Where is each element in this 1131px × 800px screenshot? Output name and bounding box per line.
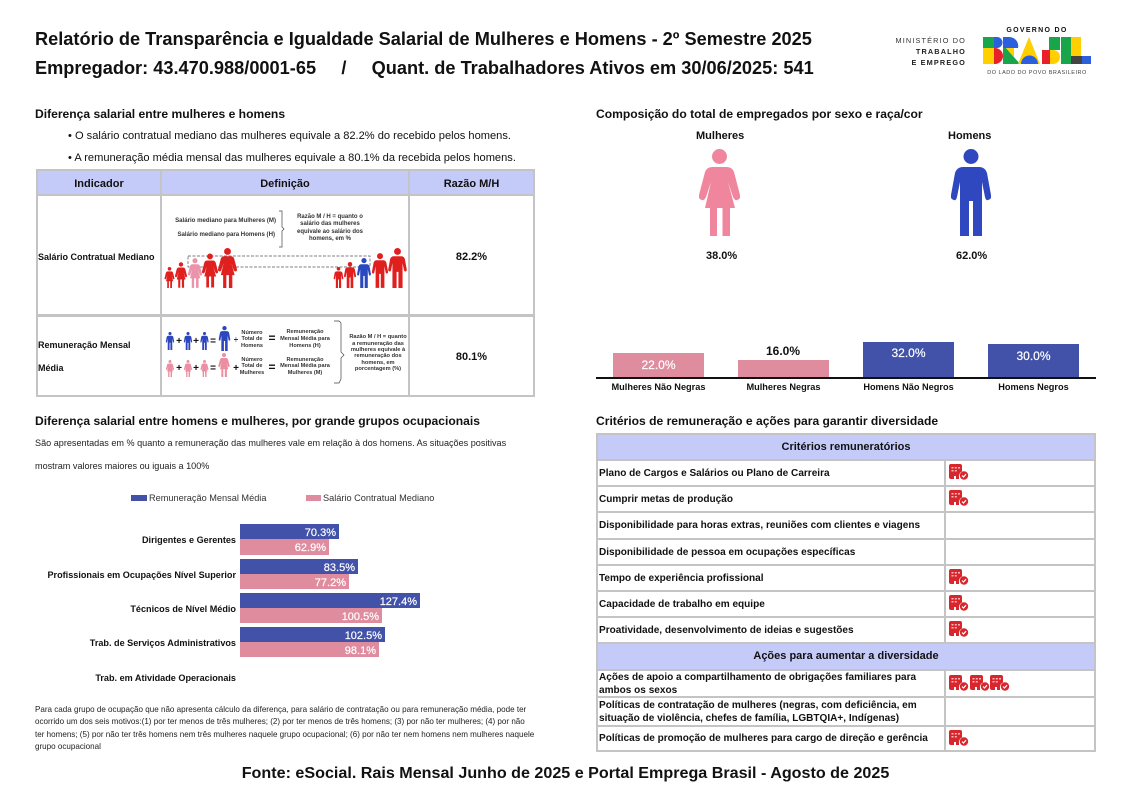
row empty cell: availability overtime [944, 511, 1096, 540]
row: career plan: Plano de Cargos e Salários ou Plano de Carreira [599, 468, 830, 479]
definition cell: median salary diagram: Salário mediano para Homens (H) [177, 231, 275, 238]
row label: median salary [36, 194, 162, 317]
bars: professionals: 83.5% [324, 562, 355, 574]
label: men: Homens [948, 130, 991, 142]
text: footnote [35, 705, 534, 751]
title: Empregador: 43.470.988/0001-65 / Quant. de Trabalhadores Ativos em 30/06/2025: 541 [35, 58, 814, 78]
row icon cell: teamwork [944, 590, 1096, 618]
value: 82.2% [408, 194, 535, 317]
definition cell: median salary diagram: salário das mulheres [300, 221, 361, 227]
definition cell: median salary diagram [160, 194, 410, 317]
definition cell: average pay diagram: Razão M / H = quanto [349, 334, 407, 340]
text: chart explanation: mostram valores maiores ou iguais a 100% [35, 460, 209, 470]
row icon cell: promotion [944, 725, 1096, 752]
table header: remuneration criteria [596, 433, 1096, 461]
category: professionals: Profissionais em Ocupações Nível Superior [47, 570, 236, 580]
logo: government ministry and Brasil: MINISTÉRIO DO [896, 36, 966, 45]
title [35, 29, 814, 78]
definition cell: average pay diagram: Total de [241, 336, 263, 342]
bar: non-black men: 32.0% [891, 346, 926, 360]
category: operational: Trab. em Atividade Operacionais [95, 673, 236, 683]
bar chart: occupational groups: 100.5% [342, 611, 379, 623]
icon: woman [699, 149, 740, 236]
legend: Remuneração Mensal Média [149, 493, 266, 503]
title: Relatório de Transparência e Igualdade Salarial de Mulheres e Homens - 2º Semestre 2025 [35, 29, 812, 49]
row label: average pay: Remuneração Mensal [38, 340, 131, 350]
text: median salary ratio: • O salário contratual mediano das mulheres equivale a 82.2% do recebido pelos homens. [68, 130, 511, 142]
definition cell: median salary diagram: equivale ao salário dos [297, 229, 364, 235]
definition cell: average pay diagram: a remuneração das [352, 341, 404, 347]
definition cell: average pay diagram: Número [241, 330, 263, 336]
value: women 38%: 38.0% [706, 250, 737, 262]
row icon cell: proactivity [944, 616, 1096, 644]
logo: government ministry and Brasil: GOVERNO DO [1006, 27, 1068, 34]
definition cell: average pay diagram: + [176, 336, 182, 347]
row icon cell: career plan [944, 459, 1096, 487]
row: availability overtime [596, 511, 946, 540]
panel: occupational groups [35, 414, 534, 751]
definition cell: average pay diagram: Mulheres (M) [288, 370, 322, 376]
row: specific occupations: Disponibilidade de pessoa em ocupações específicas [599, 547, 855, 558]
definition cell: average pay diagram: Remuneração [286, 329, 324, 335]
legend [131, 493, 434, 503]
bars: technicians [240, 593, 420, 608]
bar: non-black men [863, 342, 954, 377]
value: 82.2%: 82.2% [456, 251, 487, 263]
row: hiring women: situação de violência, chefes de família, LGBTQIA+, Indígenas) [599, 712, 899, 724]
row: family obligations [596, 669, 946, 698]
table header: ratio [408, 169, 535, 196]
definition cell: average pay diagram: ÷ [234, 335, 239, 344]
bar: non-black women: 22.0% [641, 358, 676, 372]
definition cell: median salary diagram: Razão M / H = quanto o [297, 214, 363, 220]
label: women: Mulheres [696, 130, 744, 142]
row icon cell: family obligations [944, 669, 1096, 698]
bars: administrative: 102.5% [345, 630, 382, 642]
definition cell: average pay diagram: Homens (H) [289, 343, 321, 349]
definition cell: average pay diagram: remuneração dos [354, 353, 402, 359]
definition cell: average pay diagram: Mulheres [240, 370, 264, 376]
heading: criteria: Critérios de remuneração e ações para garantir diversidade [596, 414, 938, 428]
definition cell: average pay diagram: + [193, 336, 199, 347]
logo: government ministry and Brasil: E EMPREGO [911, 58, 966, 67]
bar chart: occupational groups: 77.2% [315, 577, 346, 589]
row: family obligations: Ações de apoio a compartilhamento de obrigações familiares para [599, 672, 916, 683]
row: production goals [596, 485, 946, 513]
definition cell: average pay diagram [160, 315, 410, 397]
text: chart explanation [35, 438, 506, 471]
logo: government ministry and Brasil: DO LADO DO POVO BRASILEIRO [987, 70, 1087, 76]
heading: salary difference: Diferença salarial entre mulheres e homens [35, 107, 285, 121]
text: footnote: grupo ocupacional [35, 742, 101, 751]
text: footnote: ter homens; (5) por não ter três homens nem três mulheres naquele grupo ocupacional; (6) por não ter nem homens nem mulheres naquele [35, 730, 534, 739]
definition cell: average pay diagram: Número [241, 357, 263, 363]
row: availability overtime: Disponibilidade para horas extras, reuniões com clientes e viagens [599, 520, 920, 531]
definition cell: average pay diagram: porcentagem (%) [355, 366, 401, 372]
row icon cell: production goals [944, 485, 1096, 513]
bars: professionals [240, 559, 358, 574]
value: 80.1%: 80.1% [456, 351, 487, 363]
table header: diversity actions: Ações para aumentar a diversidade [753, 650, 939, 662]
bar: black women [738, 360, 829, 377]
row: promotion [596, 725, 946, 752]
definition cell: average pay diagram: Mensal Média para [280, 336, 331, 342]
definition cell: average pay diagram: + [233, 363, 239, 374]
category: non-black women: Mulheres Não Negras [612, 382, 705, 392]
table header: indicator [36, 169, 162, 196]
category: black men: Homens Negros [998, 382, 1069, 392]
definition cell: average pay diagram: homens, em [361, 360, 395, 366]
table header: definition: Definição [260, 178, 310, 190]
bars: administrative [240, 627, 385, 642]
definition cell: median salary diagram: homens, em % [309, 236, 352, 242]
heading: composition: Composição do total de empregados por sexo e raça/cor [596, 107, 923, 121]
row empty cell: hiring women [944, 696, 1096, 727]
row: career plan [596, 459, 946, 487]
table header: remuneration criteria: Critérios remuneratórios [782, 441, 910, 453]
legend: Salário Contratual Mediano [323, 493, 434, 503]
row: production goals: Cumprir metas de produção [599, 494, 733, 505]
logo: government ministry and Brasil [896, 27, 1091, 76]
bar chart: sex and race [596, 342, 1096, 392]
row: teamwork: Capacidade de trabalho em equipe [599, 599, 765, 610]
definition cell: average pay diagram: + [176, 363, 182, 374]
row label: average pay: Média [38, 363, 64, 373]
bar: black men [988, 344, 1079, 377]
bars: managers: 70.3% [305, 527, 336, 539]
value: 80.1% [408, 315, 535, 397]
row: family obligations: ambos os sexos [599, 684, 677, 696]
bars: technicians: 127.4% [380, 596, 417, 608]
bar chart: occupational groups [47, 524, 420, 683]
bar: black men: 30.0% [1016, 349, 1051, 363]
row: experience [596, 564, 946, 592]
definition cell: average pay diagram: Total de [241, 363, 263, 369]
definition cell: average pay diagram: mulheres equivale à [351, 347, 406, 353]
row: hiring women: Políticas de contratação de mulheres (negras, com deficiência, em [599, 700, 917, 711]
heading: occupational groups: Diferença salarial entre homens e mulheres, por grande grupos ocupacionais [35, 414, 480, 428]
row icon cell: experience [944, 564, 1096, 592]
footer source: Fonte: eSocial. Rais Mensal Junho de 2025 e Portal Emprega Brasil - Agosto de 2025 [242, 764, 889, 782]
row: proactivity: Proatividade, desenvolvimento de ideias e sugestões [599, 625, 854, 636]
row empty cell: specific occupations [944, 538, 1096, 566]
icon: man [951, 149, 991, 236]
panel: salary difference [35, 107, 535, 397]
table header: diversity actions [596, 642, 1096, 671]
panel: composition by sex and race [596, 107, 1096, 392]
category: technicians: Técnicos de Nível Médio [130, 604, 236, 614]
category: black women: Mulheres Negras [746, 382, 821, 392]
definition cell: average pay diagram: = [210, 363, 216, 374]
row: teamwork [596, 590, 946, 618]
panel: remuneration criteria and diversity actions [596, 414, 1096, 752]
value: men 62%: 62.0% [956, 250, 987, 262]
bar chart: occupational groups: 98.1% [345, 645, 376, 657]
table header: ratio: Razão M/H [444, 178, 499, 190]
logo: government ministry and Brasil: TRABALHO [916, 47, 966, 56]
row label: average pay [36, 315, 162, 397]
text: footnote: ocorrido um dos seis motivos:(1) por ter menos de três mulheres; (2) por ter menos de três homens; (3) por não ter mulheres; (4) por não [35, 717, 525, 726]
bars: managers [240, 524, 339, 539]
definition cell: average pay diagram: + [193, 363, 199, 374]
text: chart explanation: São apresentadas em % quanto a remuneração das mulheres vale em relação à dos homens. As situações positivas [35, 438, 506, 448]
definition cell: average pay diagram: = [210, 336, 216, 347]
bar chart: occupational groups: 62.9% [295, 542, 326, 554]
definition cell: average pay diagram: Mensal Média para [280, 363, 331, 369]
row: promotion: Políticas de promoção de mulheres para cargo de direção e gerência [599, 733, 928, 744]
row: hiring women [596, 696, 946, 727]
row label: median salary: Salário Contratual Mediano [38, 252, 155, 262]
category: administrative: Trab. de Serviços Administrativos [90, 638, 236, 648]
definition cell: median salary diagram: Salário mediano para Mulheres (M) [175, 217, 276, 224]
category: managers: Dirigentes e Gerentes [142, 535, 236, 545]
bar: non-black women [613, 353, 704, 377]
definition cell: average pay diagram: = [268, 331, 276, 345]
text: footnote: Para cada grupo de ocupação que não apresenta cálculo da diferença, para salário de contratação ou para remuneração média, pode ter [35, 705, 526, 714]
text: average pay ratio: • A remuneração média mensal das mulheres equivale a 80.1% da recebida pelos homens. [68, 152, 516, 164]
row: experience: Tempo de experiência profissional [599, 573, 764, 584]
definition cell: average pay diagram: Homens [241, 343, 263, 349]
category: non-black men: Homens Não Negros [863, 382, 954, 392]
row: proactivity [596, 616, 946, 644]
value: black women: 16.0% [766, 344, 800, 358]
row: specific occupations [596, 538, 946, 566]
definition cell: average pay diagram: Remuneração [286, 357, 324, 363]
table header: definition [160, 169, 410, 196]
definition cell: average pay diagram: = [268, 360, 276, 374]
table header: indicator: Indicador [74, 178, 124, 190]
